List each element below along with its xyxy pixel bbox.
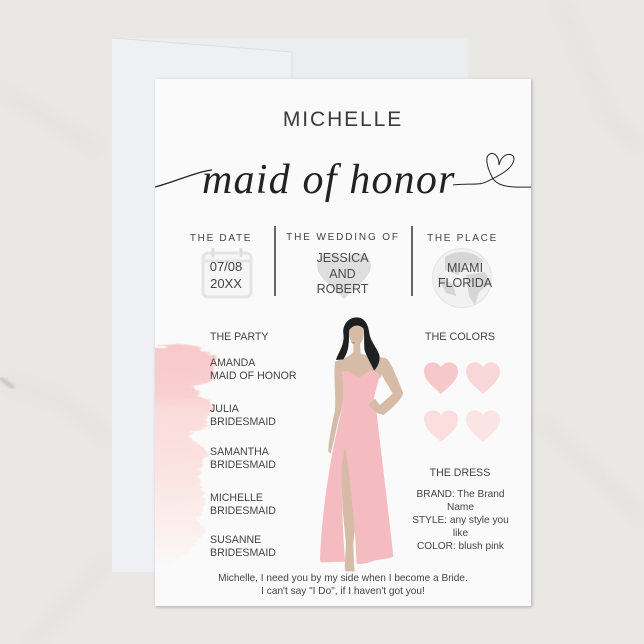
member xyxy=(210,403,276,428)
date text: 20XX xyxy=(210,276,242,290)
member: BRIDESMAID xyxy=(210,546,276,558)
heart 2 xyxy=(466,362,500,394)
couple names xyxy=(316,251,369,296)
member: BRIDESMAID xyxy=(210,458,276,470)
member: SAMANTHA xyxy=(210,446,269,458)
lips xyxy=(351,342,355,344)
couple names: AND xyxy=(329,266,356,280)
member: BRIDESMAID xyxy=(210,504,276,516)
heart 4 xyxy=(466,410,500,442)
heading: the dress: THE DRESS xyxy=(430,467,490,479)
colors section xyxy=(424,331,500,442)
dress xyxy=(320,370,393,564)
couple names: ROBERT xyxy=(317,282,368,296)
heart 3 xyxy=(424,410,458,442)
divider xyxy=(411,226,412,296)
info row xyxy=(190,226,498,308)
wedding column xyxy=(286,232,400,299)
member xyxy=(210,534,276,558)
envelope xyxy=(112,38,468,572)
card xyxy=(155,79,531,606)
closing message xyxy=(218,573,468,597)
party list xyxy=(210,331,297,558)
member: MAID OF HONOR xyxy=(210,370,297,382)
place text: FLORIDA xyxy=(438,276,492,290)
member: BRIDESMAID xyxy=(210,416,276,428)
heart 1 xyxy=(424,362,458,394)
hand xyxy=(368,399,380,414)
body xyxy=(328,343,403,453)
place text xyxy=(438,261,492,290)
name heading: MICHELLE xyxy=(283,108,403,131)
member: MICHELLE xyxy=(210,492,263,504)
divider xyxy=(274,226,276,296)
icon: calendar xyxy=(202,248,252,298)
closing message: Michelle, I need you by my side when I become a Bride. xyxy=(218,573,468,584)
label: the date: THE DATE xyxy=(190,233,252,244)
script title with swash and heart xyxy=(155,152,531,203)
date text: 07/08 xyxy=(210,259,242,274)
couple names: JESSICA xyxy=(316,251,369,265)
face xyxy=(349,326,364,346)
watercolor swatch xyxy=(155,344,218,544)
color hearts xyxy=(424,362,500,442)
label: the wedding of: THE WEDDING OF xyxy=(286,232,400,243)
heading: the colors: THE COLORS xyxy=(425,331,495,343)
member xyxy=(210,357,297,382)
place column xyxy=(427,233,498,308)
date text xyxy=(210,259,242,290)
leg xyxy=(341,447,357,571)
member xyxy=(210,446,276,470)
dress details xyxy=(412,467,509,552)
member: SUSANNE xyxy=(210,534,261,546)
dress text: COLOR: blush pink xyxy=(417,541,504,552)
member: AMANDA xyxy=(210,357,255,369)
dress text: STYLE: any style you xyxy=(412,515,509,526)
hair xyxy=(336,317,380,371)
member xyxy=(210,492,276,516)
date column xyxy=(190,233,252,298)
dress text xyxy=(412,489,509,552)
icon: globe xyxy=(432,248,492,308)
icon: heart xyxy=(317,254,371,299)
dress text: like xyxy=(453,528,468,539)
script title with swash and heart: maid of honor xyxy=(202,157,456,203)
member: JULIA xyxy=(210,403,239,415)
dress text: Name xyxy=(447,502,474,513)
place text: MIAMI xyxy=(447,261,483,275)
figure in dress xyxy=(320,317,404,572)
closing message: I can't say "I Do", if I haven't got you! xyxy=(261,586,425,597)
heading: the party: THE PARTY xyxy=(210,331,268,343)
dress text: BRAND: The Brand xyxy=(417,489,504,500)
label: the place: THE PLACE xyxy=(427,233,498,244)
